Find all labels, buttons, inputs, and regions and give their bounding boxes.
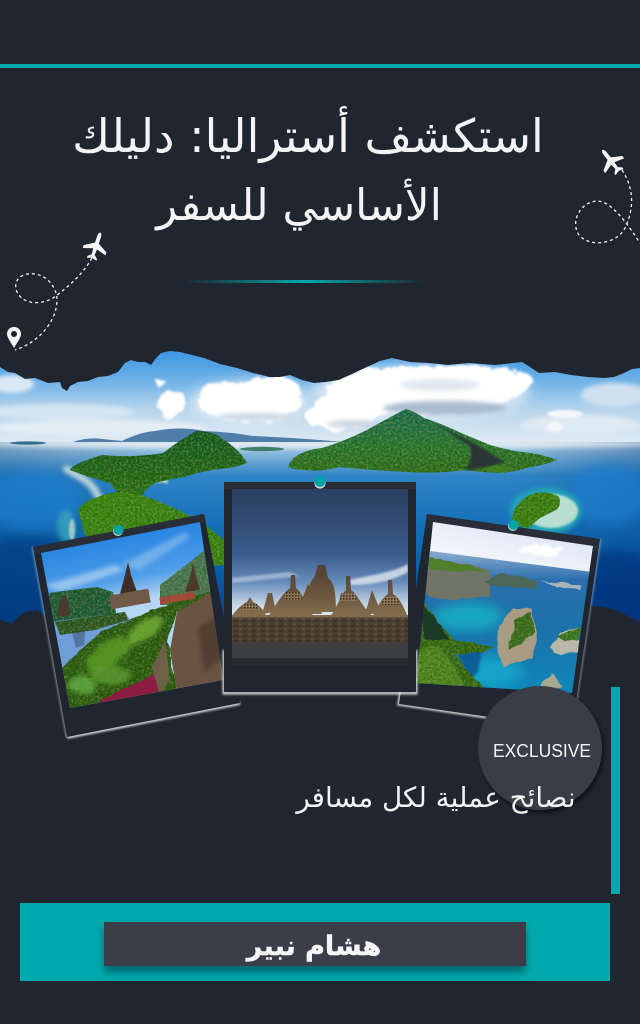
puffy clouds <box>156 366 532 430</box>
left main island <box>70 431 247 496</box>
foreground green slope <box>416 603 494 688</box>
centre photo scene <box>232 489 408 665</box>
title: الأساسي للسفر <box>154 178 442 231</box>
right volcano island <box>288 409 557 473</box>
distant cliffs <box>423 558 490 600</box>
pagodas and temple <box>120 562 137 594</box>
right rocks <box>550 627 580 654</box>
vertical teal bar <box>611 687 620 894</box>
cloud shading <box>215 379 507 428</box>
right atoll <box>510 487 582 535</box>
stone ledge <box>152 640 170 695</box>
title divider glow line <box>185 280 425 283</box>
beach left <box>64 468 100 506</box>
pin: left <box>113 525 124 536</box>
red flowers <box>98 674 158 703</box>
photo card: centre stupas <box>224 482 416 693</box>
wispy clouds <box>0 375 640 436</box>
distant hills <box>10 428 343 451</box>
photo card: left temple <box>30 514 240 737</box>
pin: right <box>508 520 518 531</box>
cloud halo <box>190 364 530 424</box>
subtitle: نصائح عملية لكل مسافر <box>294 781 576 814</box>
exclusive badge: EXCLUSIVE <box>493 741 591 761</box>
stupas <box>232 565 408 617</box>
title: استكشف أستراليا: دليلك <box>72 106 544 164</box>
icon: right flight path with plane <box>576 143 640 243</box>
stone floor <box>232 643 408 658</box>
left photo scene <box>41 522 223 708</box>
garden <box>62 592 212 708</box>
lower green islet <box>78 492 224 570</box>
exclusive badge <box>478 686 602 810</box>
path <box>170 590 225 692</box>
wall <box>232 617 408 644</box>
author banner: هشام نبير <box>245 931 381 962</box>
right photo scene <box>416 522 593 693</box>
hero photo: tropical islands <box>0 345 640 642</box>
pin: centre <box>314 476 326 489</box>
photo card: right cliffs <box>399 514 600 729</box>
top teal line <box>0 64 640 68</box>
author banner <box>20 903 610 981</box>
title <box>72 106 544 231</box>
icon: left flight path with plane and pin <box>7 229 112 350</box>
rock stack <box>497 608 537 667</box>
